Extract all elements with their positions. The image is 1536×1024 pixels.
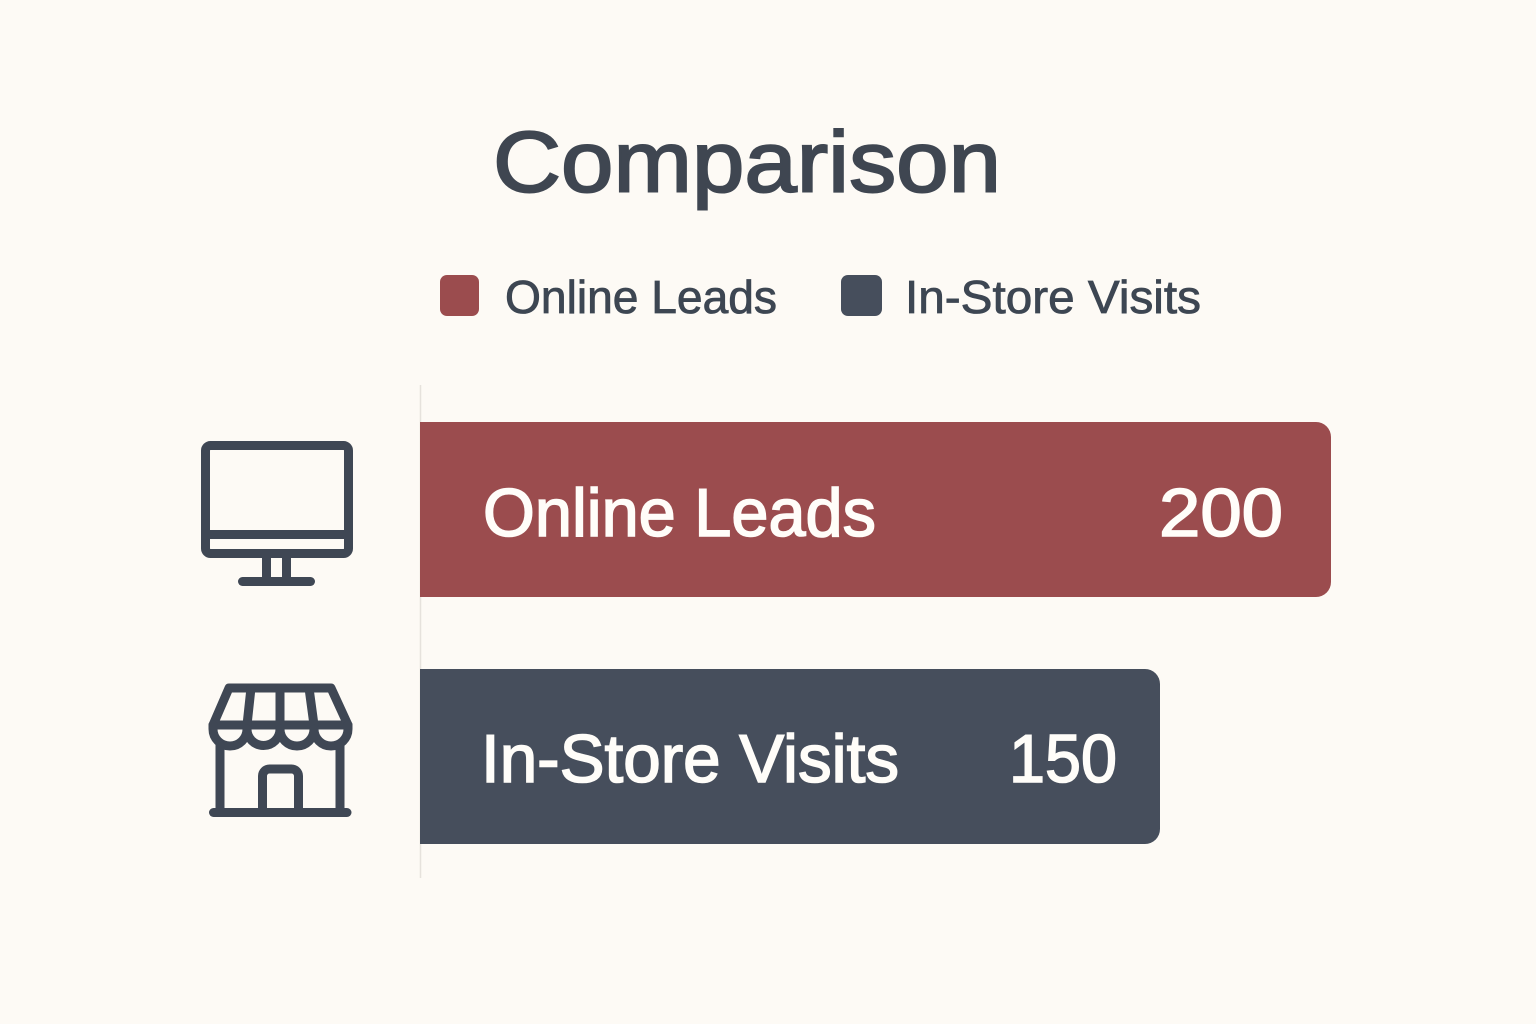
bar value: 200: 200: [1159, 475, 1283, 551]
bar: online leads: [420, 422, 1331, 597]
title: Comparison: [493, 114, 1001, 210]
bar value: 150: 150: [1009, 721, 1117, 797]
icon: desktop monitor: [206, 446, 348, 582]
legend label: in-store visits: In-Store Visits: [905, 271, 1201, 323]
icon: storefront: [213, 688, 348, 812]
legend label: online leads: Online Leads: [505, 271, 777, 323]
axis line: [420, 385, 422, 878]
legend swatch: online leads: [440, 275, 479, 316]
bar label: online leads: Online Leads: [483, 475, 876, 551]
legend: [440, 271, 1201, 323]
bar: in-store visits: [420, 669, 1160, 844]
bar label: in-store visits: In-Store Visits: [481, 721, 899, 797]
legend swatch: in-store visits: [841, 275, 882, 316]
